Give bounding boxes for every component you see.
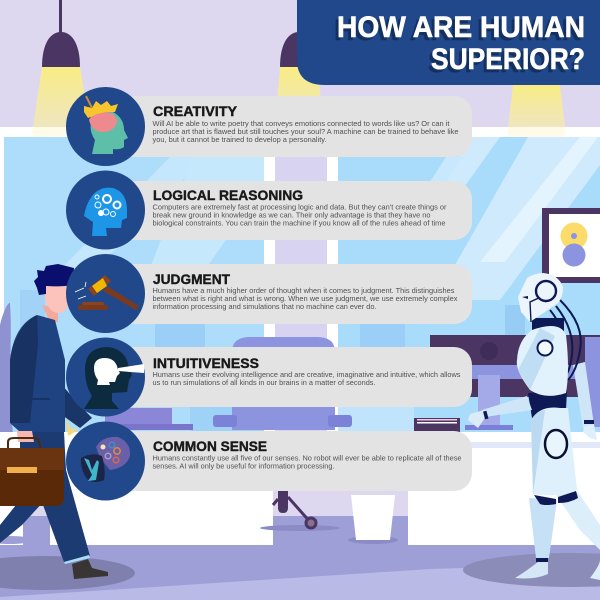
heading: judgment: JUDGMENT — [153, 271, 230, 287]
robot: neck — [532, 318, 564, 336]
person walking — [0, 264, 108, 579]
person: shoe — [72, 559, 108, 579]
icon: gears head — [66, 170, 145, 250]
waste bin — [351, 495, 395, 540]
robot: waist — [528, 390, 567, 418]
text: intuitiveness: us to run simulations of all kinds in our brains in a matter of seconds. — [152, 378, 376, 387]
wall frame — [542, 208, 600, 283]
person: trousers — [20, 432, 90, 562]
title — [334, 11, 585, 79]
heading: intuitiveness: INTUITIVENESS — [153, 355, 259, 371]
person: sleeve — [62, 385, 92, 428]
icon: gavel — [66, 254, 145, 333]
panel: logical reasoning — [66, 170, 472, 250]
icon: head with light beam — [66, 338, 145, 416]
text: creativity: produce art that is flawed but still touches your soul? A machine can be trained to behave like — [152, 127, 458, 136]
robot: back arm — [573, 362, 594, 428]
text: judgment: Humans have a much higher order of thought when it comes to judgment. This distinguishes — [152, 286, 455, 295]
robot: front arm — [482, 396, 532, 417]
books — [414, 418, 460, 432]
robot — [468, 273, 600, 580]
text: logical reasoning: Computers are extremely fast at processing logic and data. But they can't create things or — [152, 202, 447, 212]
text: logical reasoning: break new ground in knowledge as we can. Their only advantage is that they have no — [152, 210, 430, 220]
robot: knee joint — [545, 430, 567, 458]
title: HOW ARE HUMAN — [334, 14, 582, 47]
text: creativity — [152, 119, 458, 144]
plant — [0, 303, 14, 440]
icon: creative head — [66, 87, 145, 166]
sofa and side table — [105, 337, 352, 430]
robot: chest joint — [538, 340, 552, 356]
title banner — [297, 0, 600, 85]
robot: front lower leg — [529, 498, 557, 558]
office chair base — [273, 491, 316, 528]
lamp 1 — [32, 0, 91, 137]
robot: head — [518, 273, 563, 322]
heading: logical reasoning: LOGICAL REASONING — [153, 187, 303, 203]
robot: eye — [522, 296, 528, 299]
title: SUPERIOR? — [428, 46, 582, 79]
text: creativity: you, but it cannot be trained to develop a personality. — [152, 135, 326, 144]
panel: judgment — [66, 254, 472, 333]
lamp 3 — [507, 85, 566, 137]
heading: common sense: COMMON SENSE — [153, 438, 267, 454]
text: intuitiveness — [152, 370, 461, 387]
panel: common sense — [66, 422, 472, 500]
text: judgment: information processing and simulations that no machine can ever do. — [152, 302, 376, 311]
cabinet — [430, 335, 600, 430]
person: briefcase — [0, 438, 64, 506]
text: logical reasoning: biological constraints. You can train the machine if you know all of the rules ahead of time — [152, 218, 446, 228]
desk and floor — [0, 432, 600, 600]
person: hand — [17, 431, 34, 442]
text: common sense — [152, 454, 462, 470]
robot: face seam — [530, 297, 546, 322]
text: logical reasoning — [152, 202, 447, 228]
robot: knee guards — [534, 495, 556, 505]
text: creativity: Will AI be able to write poetry that conveys emotions connected to words like us? Or can it — [152, 119, 450, 128]
text: judgment: between what is right and what is wrong. When we use judgment, we use extremely complex — [152, 294, 458, 303]
person: hair — [34, 264, 74, 295]
person: pocket — [32, 398, 50, 400]
text: common sense: senses. AI will only be useful for information processing. — [152, 462, 334, 470]
robot: hip and thigh — [531, 408, 577, 495]
text: intuitiveness: Humans use their evolving intelligence and are creative, imaginative and intuitive, which allows — [152, 370, 461, 379]
person: jacket side — [10, 315, 38, 423]
heading: creativity: CREATIVITY — [153, 103, 238, 119]
panel: creativity — [66, 87, 472, 166]
icon: senses — [66, 422, 145, 500]
robot: torso — [517, 326, 568, 396]
panel: intuitiveness — [66, 338, 472, 416]
person: face — [44, 285, 69, 313]
text: common sense: Humans constantly use all five of our senses. No robot will ever be able to replicate all of these — [152, 454, 462, 462]
text: judgment — [152, 286, 458, 311]
robot: rear leg — [556, 492, 600, 550]
lamp 2 — [274, 32, 324, 137]
person: jacket — [10, 315, 65, 432]
person: hand behind — [66, 418, 78, 436]
person: neck — [42, 305, 58, 322]
robot: head joint — [536, 281, 556, 301]
person: cuff — [64, 555, 90, 564]
title: HOW ARE HUMAN — [337, 11, 585, 44]
robot: wires — [550, 300, 581, 380]
person: back leg — [0, 500, 45, 543]
